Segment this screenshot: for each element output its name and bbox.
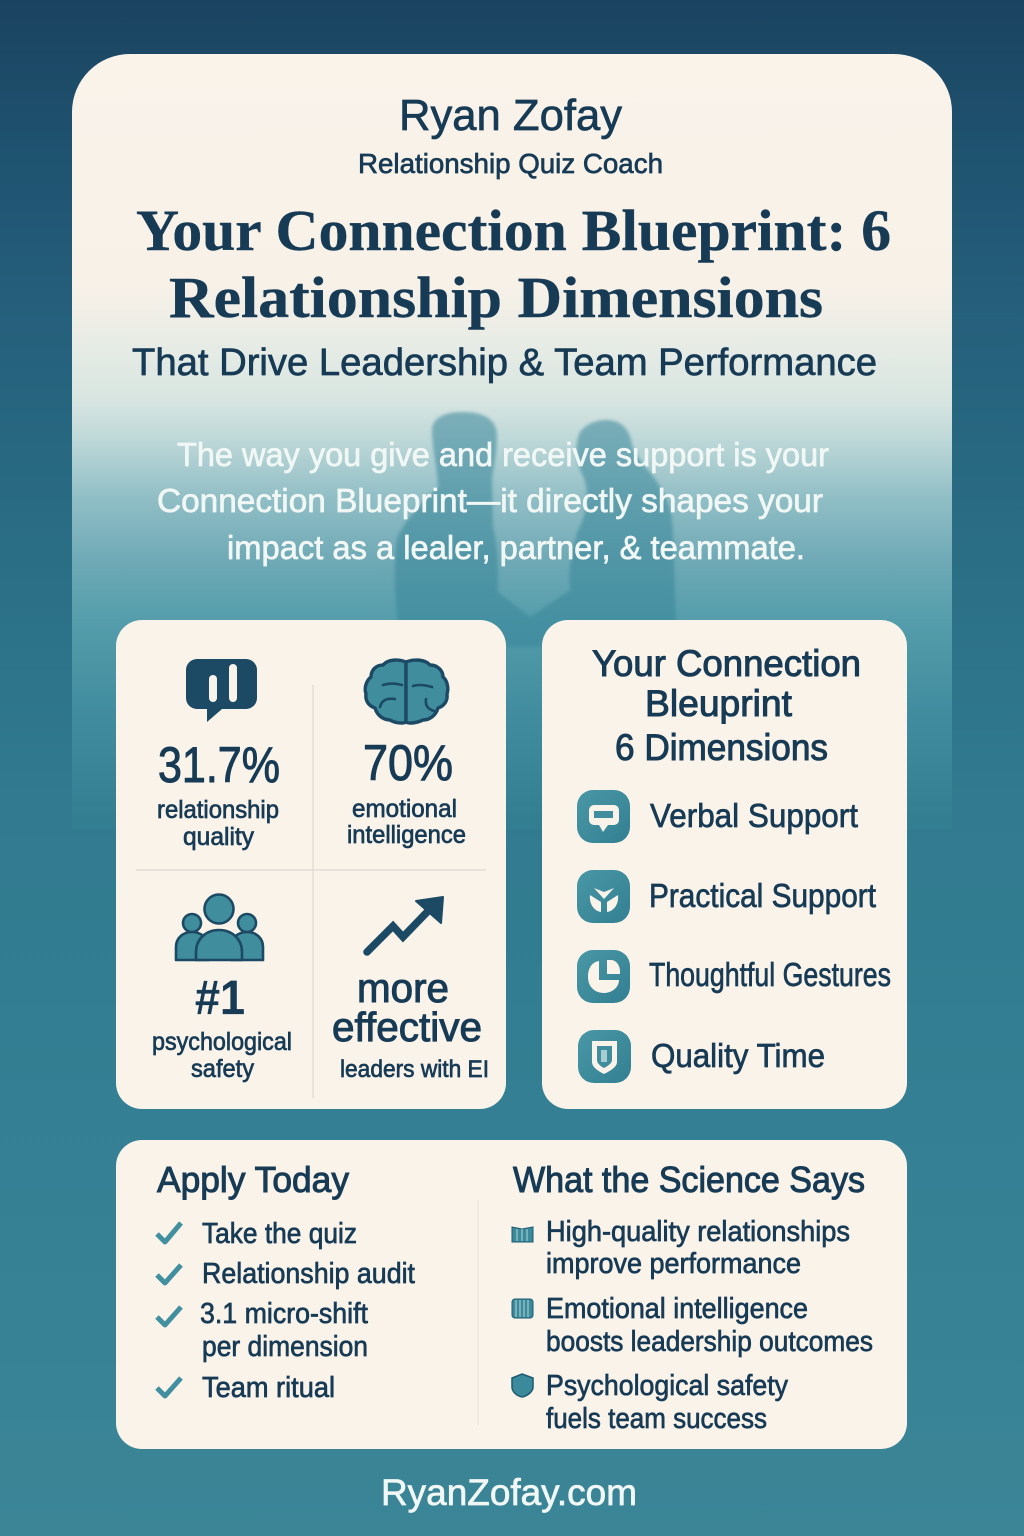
stat: psychological safety <box>152 894 292 1083</box>
stat: psychological safety: #1 <box>195 972 245 1025</box>
stat: emotional intelligence: 70% <box>363 735 453 791</box>
column: apply today: Relationship audit <box>202 1258 415 1290</box>
panel heading: 6 Dimensions <box>615 727 828 768</box>
column: what the science says: High-quality relationships <box>546 1216 850 1248</box>
column: apply today: Take the quiz <box>202 1218 357 1250</box>
icon: team <box>176 894 263 960</box>
panel heading: Your Connection <box>592 643 861 684</box>
column: apply today: per dimension <box>202 1331 368 1363</box>
column: what the science says <box>512 1159 873 1435</box>
stat: psychological safety: safety <box>191 1055 254 1083</box>
main title: Your Connection Blueprint: 6 <box>136 198 891 263</box>
item: quality time <box>578 1030 825 1083</box>
icon: rising arrow <box>367 897 443 952</box>
header name: Ryan Zofay <box>399 91 622 140</box>
column: apply today <box>157 1159 415 1404</box>
column: what the science says: fuels team success <box>546 1403 767 1435</box>
column: what the science says: boosts leadership outcomes <box>546 1326 873 1358</box>
stat: more effective leaders: leaders with EI <box>340 1056 489 1083</box>
stat: psychological safety: psychological <box>152 1028 292 1056</box>
icon: check <box>157 1307 181 1325</box>
icon: check <box>157 1265 181 1283</box>
main title: Relationship Dimensions <box>169 265 823 330</box>
item: practical support <box>577 870 876 923</box>
icon: shield <box>512 1374 533 1397</box>
stat: more effective leaders: effective <box>332 1004 482 1050</box>
column: what the science says: What the Science Says <box>513 1159 865 1200</box>
item: thoughtful gestures <box>577 950 891 1003</box>
column: apply today: Apply Today <box>157 1159 349 1200</box>
icon: shield <box>578 1030 631 1083</box>
item: quality time: Quality Time <box>651 1037 825 1074</box>
stat: more effective leaders <box>332 897 489 1083</box>
icon: book stack <box>512 1299 533 1318</box>
panel: six dimensions <box>542 620 907 1109</box>
column: apply today: Team ritual <box>202 1372 335 1404</box>
intro paragraph: The way you give and receive support is your <box>177 436 829 473</box>
intro paragraph: Connection Blueprint—it directly shapes your <box>157 482 823 519</box>
header role: Relationship Quiz Coach <box>358 148 663 179</box>
stat: emotional intelligence: intelligence <box>347 821 466 849</box>
stat: relationship quality: relationship <box>157 796 279 824</box>
stat: relationship quality: quality <box>183 823 254 851</box>
silhouette: two people holding hands <box>395 412 676 647</box>
item: thoughtful gestures: Thoughtful Gestures <box>649 956 891 993</box>
icon: speech bubble <box>577 790 630 843</box>
panel heading <box>592 643 861 768</box>
column: what the science says: improve performance <box>546 1248 801 1280</box>
footer url: RyanZofay.com <box>381 1472 637 1513</box>
hero panel <box>72 54 952 830</box>
icon: chat bars <box>186 659 257 722</box>
icon: pie chart <box>577 950 630 1003</box>
icon: check <box>157 1223 181 1242</box>
stat: relationship quality: 31.7% <box>158 737 280 793</box>
stat: emotional intelligence <box>347 660 466 849</box>
stat: emotional intelligence: emotional <box>352 795 457 823</box>
main title <box>136 198 891 330</box>
item: practical support: Practical Support <box>649 877 876 914</box>
intro paragraph <box>157 436 829 566</box>
column: apply today: 3.1 micro-shift <box>200 1298 368 1330</box>
item: verbal support: Verbal Support <box>650 797 858 834</box>
icon: brain <box>365 660 448 723</box>
stat: more effective leaders: more <box>357 965 449 1011</box>
panel: statistics <box>116 620 506 1109</box>
column: what the science says: Emotional intelligence <box>546 1293 808 1325</box>
intro paragraph: impact as a lealer, partner, & teammate. <box>227 529 805 566</box>
icon: book <box>512 1227 533 1242</box>
panel heading: Bleuprint <box>645 683 793 724</box>
column: what the science says: Psychological safety <box>546 1370 788 1402</box>
panel: apply and science <box>116 1140 907 1449</box>
subtitle: That Drive Leadership & Team Performance <box>132 342 877 384</box>
item: verbal support <box>577 790 858 843</box>
stat: relationship quality <box>157 659 280 851</box>
icon: leaves <box>577 870 630 923</box>
icon: check <box>157 1378 181 1396</box>
